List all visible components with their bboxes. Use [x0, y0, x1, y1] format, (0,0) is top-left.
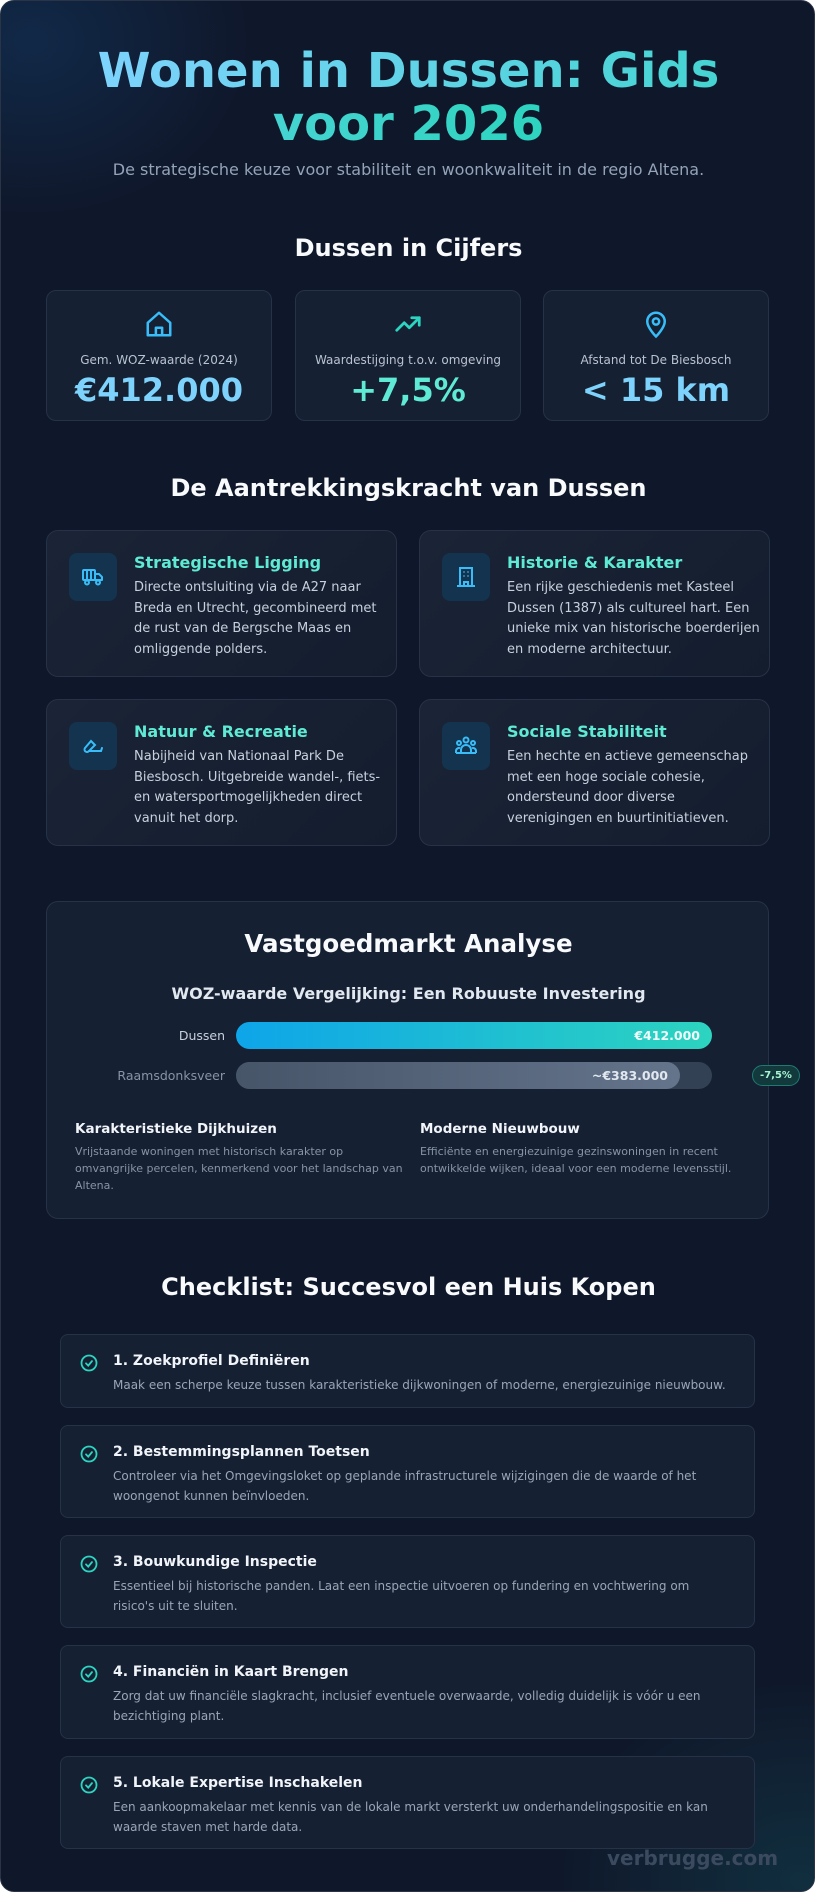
checklist item 4: Zorg dat uw financiële slagkracht, inclusief eventuele overwaarde, volledig duidelijk is vóór u een bezichtiging plant.	[113, 1689, 700, 1723]
heading: Dussen in Cijfers: Dussen in Cijfers	[295, 234, 522, 262]
stat card: Waardestijging	[295, 290, 521, 421]
feature: Historie & Karakter: Een rijke geschiedenis met Kasteel Dussen (1387) als cultureel hart. Een unieke mix van historische boerderijen en moderne architectuur.	[507, 580, 760, 656]
text block: Dijkhuizen: Karakteristieke Dijkhuizen	[75, 1121, 277, 1137]
checklist item 5: 5. Lokale Expertise Inschakelen	[113, 1775, 363, 1791]
checklist item 1: 1. Zoekprofiel Definiëren	[113, 1353, 310, 1369]
text block: Nieuwbouw: Moderne Nieuwbouw	[420, 1121, 580, 1137]
feature: Natuur & Recreatie: Nabijheid van Nationaal Park De Biesbosch. Uitgebreide wandel-, fiets- en watersportmogelijkheden direct vanuit het dorp.	[134, 749, 380, 826]
feature: Sociale Stabiliteit	[419, 699, 770, 846]
checklist item 1	[60, 1334, 755, 1408]
subtitle: De strategische keuze voor stabiliteit en woonkwaliteit in de regio Altena.	[113, 160, 704, 179]
checklist item 2	[60, 1425, 755, 1518]
feature: Sociale Stabiliteit: Sociale Stabiliteit	[507, 722, 667, 741]
heading: Checklist: Checklist: Succesvol een Huis Kopen	[161, 1273, 656, 1301]
chart subtitle: WOZ-waarde Vergelijking: Een Robuuste Investering	[171, 984, 646, 1003]
feature: Strategische Ligging	[46, 530, 397, 677]
icon: people	[442, 722, 490, 770]
checklist item 3	[60, 1535, 755, 1628]
checklist item 1: Maak een scherpe keuze tussen karakteristieke dijkwoningen of moderne, energiezuinige nieuwbouw.	[113, 1378, 726, 1392]
stat card: WOZ: €412.000	[75, 371, 243, 409]
icon: truck	[69, 553, 117, 601]
stat card: Afstand: Afstand tot De Biesbosch	[580, 353, 731, 367]
text block: Nieuwbouw	[420, 1121, 731, 1175]
checklist item 4	[60, 1645, 755, 1739]
icon: trend	[395, 316, 421, 332]
checklist item 2: 2. Bestemmingsplannen Toetsen	[113, 1444, 370, 1460]
icon: leaf/path	[69, 722, 117, 770]
feature: Natuur & Recreatie	[46, 699, 397, 846]
feature: Sociale Stabiliteit: Een hechte en actieve gemeenschap met een hoge sociale cohesie, ondersteund door diverse verenigingen en buurtinitiatieven.	[507, 749, 748, 826]
panel: Vastgoedmarkt Analyse	[46, 901, 769, 1219]
feature: Strategische Ligging: Directe ontsluiting via de A27 naar Breda en Utrecht, gecombineerd met de rust van de Bergsche Maas en omliggende polders.	[134, 580, 376, 656]
stat card: WOZ	[46, 290, 272, 421]
text block: Nieuwbouw: Efficiënte en energiezuinige gezinswoningen in recent ontwikkelde wijken, ideaal voor een moderne levensstijl.	[420, 1145, 731, 1175]
stat card: Afstand	[543, 290, 769, 421]
icon: building	[442, 553, 490, 601]
checklist item 5: Een aankoopmakelaar met kennis van de lokale markt versterkt uw onderhandelingspositie en kan waarde staven met harde data.	[113, 1800, 708, 1834]
bar chart: Dussen	[179, 1028, 225, 1043]
feature: Strategische Ligging: Strategische Ligging	[134, 553, 321, 572]
footer brand: verbrugge.com	[607, 1846, 778, 1870]
text block: Dijkhuizen: Vrijstaande woningen met historisch karakter op omvangrijke percelen, kenmerkend voor het landschap van Altena.	[75, 1145, 403, 1192]
checklist item 3: Essentieel bij historische panden. Laat een inspectie uitvoeren op fundering en vochtwering om risico's uit te sluiten.	[113, 1579, 689, 1613]
feature: Historie & Karakter	[419, 530, 770, 677]
badge	[752, 1065, 800, 1086]
feature: Natuur & Recreatie: Natuur & Recreatie	[134, 722, 308, 741]
checklist item 3: 3. Bouwkundige Inspectie	[113, 1554, 317, 1570]
badge: -7,5%	[760, 1070, 792, 1081]
icon: location pin	[646, 312, 666, 338]
bar chart: €412.000	[634, 1028, 700, 1043]
bar chart: Raamsdonksveer	[117, 1068, 225, 1083]
title: Wonen in Dussen: Gids	[98, 43, 719, 99]
checklist item 2: Controleer via het Omgevingsloket op geplande infrastructurele wijzigingen die de waarde of het woongenot kunnen beïnvloeden.	[113, 1469, 696, 1503]
bar chart	[117, 1022, 800, 1089]
stat card: Waardestijging: +7,5%	[350, 371, 466, 409]
title	[98, 43, 719, 152]
stat card: WOZ: Gem. WOZ-waarde (2024)	[80, 353, 238, 367]
title: voor 2026	[273, 96, 544, 152]
heading: Aantrekkingskracht: De Aantrekkingskracht van Dussen	[170, 474, 647, 502]
feature: Historie & Karakter: Historie & Karakter	[507, 553, 682, 572]
bar chart: ~€383.000	[592, 1068, 668, 1083]
icon: house	[146, 312, 172, 336]
stat card: Afstand: < 15 km	[582, 371, 730, 409]
text block: Dijkhuizen	[75, 1121, 403, 1192]
checklist item 4: 4. Financiën in Kaart Brengen	[113, 1664, 348, 1680]
checklist item 5	[60, 1756, 755, 1849]
panel heading: Vastgoedmarkt Analyse	[244, 929, 573, 958]
stat card: Waardestijging: Waardestijging t.o.v. omgeving	[315, 353, 501, 367]
